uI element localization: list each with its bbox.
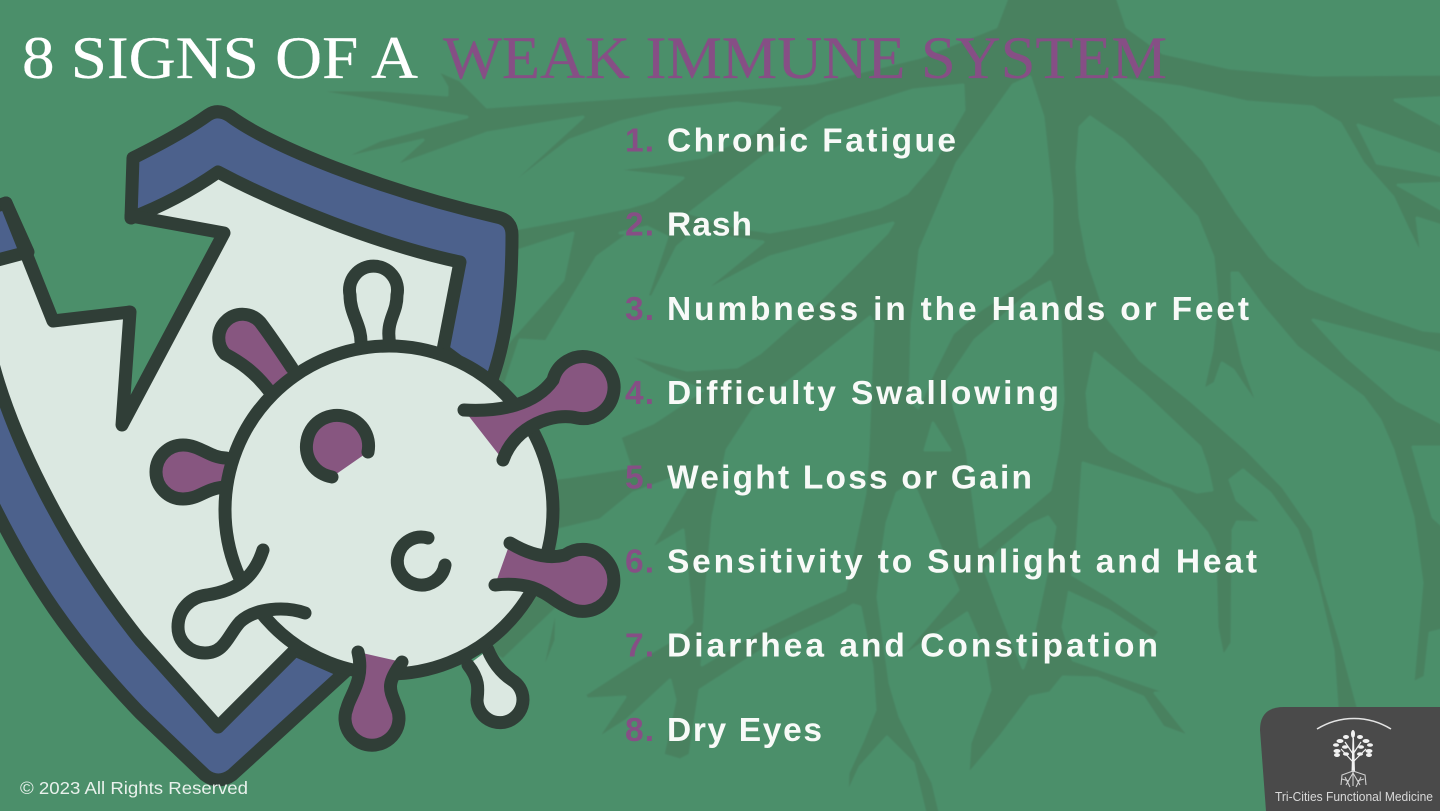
item 6: 6. — [625, 544, 654, 580]
logo: text: Tri-Cities Functional Medicine — [1275, 790, 1433, 804]
shield: blue rim left fragment — [0, 203, 28, 262]
item 8: Dry Eyes — [667, 712, 822, 749]
virus: front spikes — [178, 357, 614, 745]
title — [22, 25, 1167, 91]
logo: arc — [1317, 718, 1391, 729]
item 1: Chronic Fatigue — [667, 122, 956, 160]
virus spot: open ring — [397, 537, 445, 585]
spike: bottom — [345, 652, 402, 745]
item 6: Sensitivity to Sunlight and Heat — [667, 544, 1257, 580]
item 4: Difficulty Swallowing — [667, 375, 1059, 412]
title: white part: 8 SIGNS OF A — [22, 25, 418, 91]
item 7: 7. — [625, 628, 654, 665]
list of eight signs — [625, 122, 1257, 749]
shield: blue rim top right — [131, 112, 512, 385]
spike: right — [495, 543, 614, 611]
spike: bottom left — [178, 550, 305, 653]
shield crack outline — [6, 203, 224, 425]
copyright: © 2023 All Rights Reserved — [20, 778, 248, 798]
item 4: 4. — [625, 375, 654, 412]
item 5: Weight Loss or Gain — [667, 459, 1032, 496]
virus: body — [225, 346, 553, 674]
spike: top left — [219, 314, 292, 392]
title: purple part: WEAK IMMUNE SYSTEM — [443, 25, 1167, 91]
illustration: cracked shield with virus — [0, 112, 614, 780]
item 3: Numbness in the Hands or Feet — [667, 291, 1249, 328]
item 2 — [625, 207, 752, 244]
item 7: Diarrhea and Constipation — [667, 628, 1158, 665]
logo: roots — [1341, 770, 1366, 787]
virus spot: purple — [306, 415, 369, 477]
spike: left — [156, 445, 226, 499]
spike: bottom right — [468, 650, 523, 723]
item 8: 8. — [625, 712, 654, 749]
shield: blue rim bottom — [0, 360, 345, 780]
spike: top — [350, 266, 398, 345]
item 1: 1. — [625, 122, 654, 160]
item 2: 2. — [625, 207, 654, 244]
shield: light inner face — [0, 172, 460, 727]
virus: rear spikes — [156, 266, 523, 723]
logo: tree — [1333, 730, 1373, 772]
logo panel — [1260, 707, 1440, 811]
item 2: Rash — [667, 207, 752, 244]
spike: top right — [464, 357, 614, 460]
item 5: 5. — [625, 459, 654, 496]
item 3: 3. — [625, 291, 654, 328]
